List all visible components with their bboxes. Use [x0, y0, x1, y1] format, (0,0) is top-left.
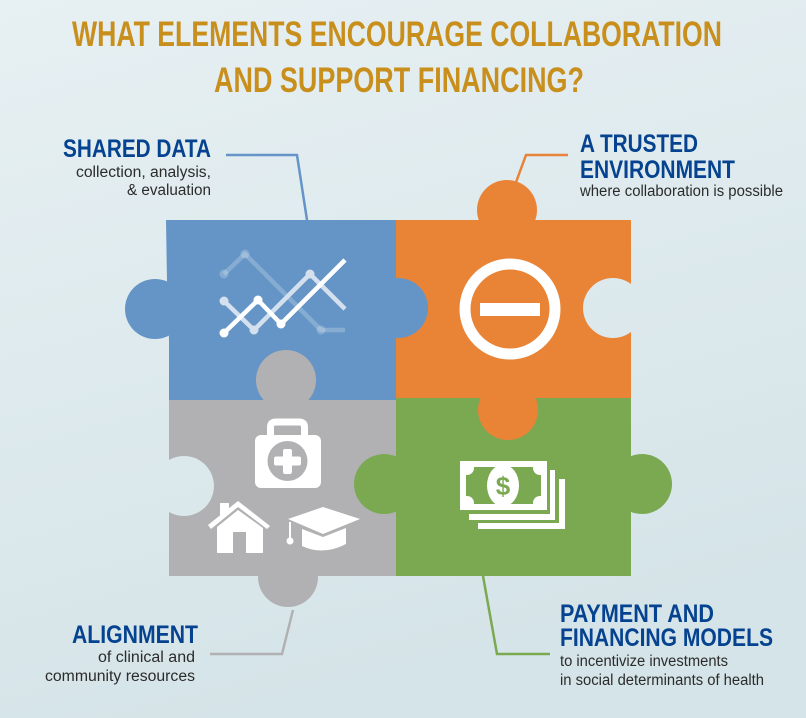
label: payment and financing models: to incentivize investments: [560, 653, 728, 670]
puzzle piece: blue: [125, 220, 396, 400]
puzzle piece: orange: [396, 180, 631, 398]
icon: banknotes: [460, 461, 565, 529]
label: payment and financing models: in social determinants of health: [560, 672, 764, 689]
label: payment and financing models: [560, 600, 773, 689]
label: shared data: collection, analysis,: [76, 164, 211, 181]
icon: no-entry circle: [465, 264, 555, 354]
leader line: trusted environment: [515, 155, 568, 185]
label: shared data: SHARED DATA: [63, 135, 211, 163]
label: trusted environment: A TRUSTED: [580, 130, 698, 158]
label: shared data: & evaluation: [127, 182, 211, 199]
label: payment and financing models: PAYMENT AND: [560, 600, 714, 628]
label: alignment: community resources: [45, 668, 195, 685]
icon: medical bag: [255, 422, 321, 488]
icon: banknotes: $: [496, 471, 511, 501]
orange knob into green: [478, 380, 538, 440]
title: AND SUPPORT FINANCING?: [214, 61, 584, 100]
leader line: alignment: [210, 610, 293, 654]
leader line: shared data: [226, 155, 307, 220]
label: trusted environment: ENVIRONMENT: [580, 156, 735, 184]
icon: house: [208, 501, 270, 553]
icon: graduation cap: [286, 507, 360, 551]
label: trusted environment: [579, 130, 783, 200]
label: payment and financing models: FINANCING MODELS: [560, 624, 773, 652]
label: alignment: of clinical and: [98, 649, 195, 666]
title: [72, 15, 722, 100]
leader line: payment: [483, 576, 550, 654]
label: alignment: ALIGNMENT: [72, 621, 198, 649]
label: trusted environment: where collaboration is possible: [579, 183, 783, 200]
puzzle piece: green: [354, 398, 672, 576]
icon: line chart: [220, 250, 345, 338]
label: shared data: [63, 135, 211, 199]
label: alignment: [45, 621, 198, 685]
blue knob into orange: [368, 278, 428, 338]
puzzle piece: gray: [169, 350, 396, 607]
